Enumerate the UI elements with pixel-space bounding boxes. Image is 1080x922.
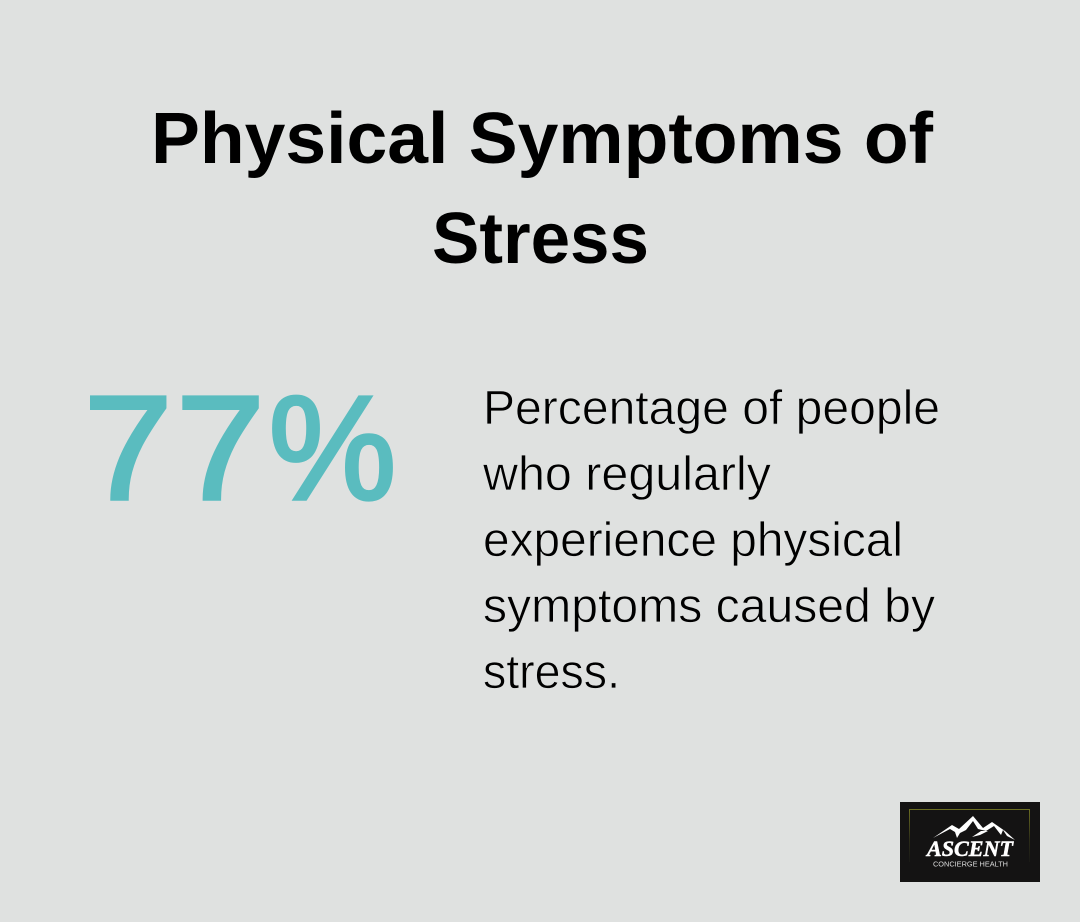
big statistic: 77%: % bbox=[269, 365, 396, 530]
big statistic: 77% bbox=[84, 365, 396, 531]
logo: Ascent Concierge Health bbox=[900, 802, 1040, 882]
description text: experience physical bbox=[483, 514, 903, 567]
icon: mountains bbox=[933, 816, 1015, 840]
title: Physical Symptoms of bbox=[151, 99, 934, 179]
title bbox=[151, 99, 934, 279]
description text: stress. bbox=[483, 646, 620, 699]
description text bbox=[482, 382, 940, 699]
description text: Percentage of people bbox=[483, 382, 940, 435]
description text: who regularly bbox=[482, 448, 771, 501]
logo wordmark: ASCENT bbox=[925, 836, 1015, 861]
title: Stress bbox=[432, 199, 649, 279]
description text: symptoms caused by bbox=[483, 580, 935, 633]
big statistic: 77%: 77 bbox=[84, 365, 265, 531]
logo tagline: CONCIERGE HEALTH bbox=[933, 860, 1008, 868]
